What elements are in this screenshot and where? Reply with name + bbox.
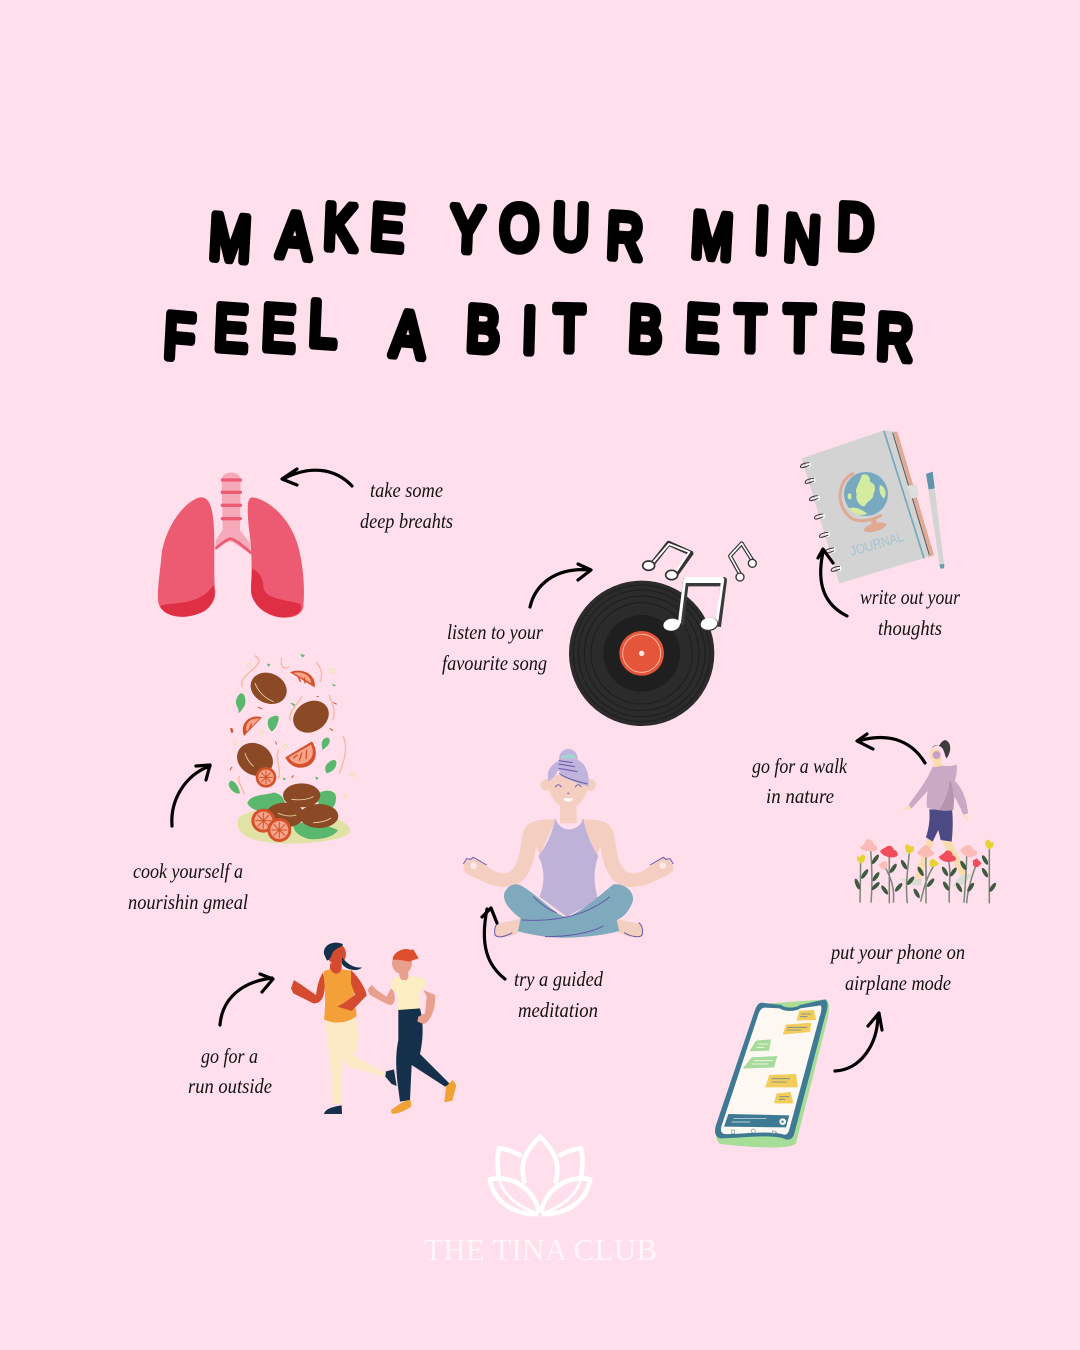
spiral rings <box>800 462 841 571</box>
patties <box>266 783 338 828</box>
label: go for a walk in nature <box>752 754 848 808</box>
top <box>538 818 598 917</box>
tomato wedges <box>290 671 315 687</box>
nav buttons <box>731 1129 777 1134</box>
floating nuts <box>231 667 335 782</box>
label: try a guided meditation: try a guided <box>514 967 603 991</box>
icon: meditating woman <box>463 749 673 938</box>
label: go for a walk in nature: in nature <box>766 784 834 808</box>
tomato slices <box>251 767 291 842</box>
large note <box>662 580 724 632</box>
message input bar <box>724 1114 789 1127</box>
icon: two women running <box>291 943 456 1114</box>
title line 2: FEEL A BIT BETTER <box>162 288 914 375</box>
label: write out your thoughts: thoughts <box>878 616 942 640</box>
pen <box>926 472 944 568</box>
label: listen to your favourite song <box>442 620 547 675</box>
label: go for a run outside: go for a <box>201 1044 258 1068</box>
squiggles <box>239 656 346 794</box>
label: take some deep breaths <box>360 478 453 533</box>
icon: journal and pen <box>800 430 944 583</box>
leaves <box>229 654 338 839</box>
icon: woman walking in flowers <box>854 740 997 903</box>
arrow: to runners <box>220 974 273 1025</box>
label: cook yourself a nourishing meal <box>128 859 248 914</box>
arrow: to meditation <box>482 908 505 979</box>
label: cook yourself a nourishing meal: nourishin gmeal <box>128 890 248 914</box>
label: go for a run outside: run outside <box>188 1074 272 1098</box>
label: put your phone on airplane mode: put your phone on <box>829 940 965 964</box>
chat bubbles <box>743 1010 816 1103</box>
hands <box>470 862 477 869</box>
arrow: to meal <box>172 765 210 826</box>
right runner <box>367 949 456 1114</box>
arrow: to lungs <box>282 469 352 486</box>
small dots <box>233 663 355 797</box>
small note <box>730 543 753 574</box>
hair <box>559 749 578 768</box>
arrow: to phone <box>835 1013 882 1071</box>
label: put your phone on airplane mode: airplane mode <box>845 971 951 995</box>
journal label: JOURNAL <box>848 528 906 559</box>
medium note <box>651 543 691 574</box>
skin: arms and shoulders <box>463 819 556 887</box>
label: try a guided meditation: meditation <box>518 998 598 1022</box>
icon: vinyl record and music notes <box>569 543 756 726</box>
label: write out your thoughts: write out your <box>860 585 961 609</box>
label: write out your thoughts <box>860 585 961 640</box>
label: take some deep breaths: take some <box>370 478 443 502</box>
label: listen to your favourite song: listen to your <box>447 620 544 644</box>
legs <box>504 884 633 938</box>
arrow: to walker <box>857 734 925 763</box>
icon: nourishing meal <box>229 654 355 844</box>
label: try a guided meditation <box>514 967 603 1022</box>
left runner <box>291 943 397 1114</box>
label: take some deep breaths: deep breahts <box>360 509 453 533</box>
title <box>162 191 914 375</box>
face <box>555 785 581 787</box>
walker <box>900 740 972 887</box>
arrow: to record <box>530 564 591 607</box>
label: go for a walk in nature: go for a walk <box>752 754 848 778</box>
feet <box>495 918 521 937</box>
sprinkles <box>229 696 337 778</box>
icon: phone on airplane mode <box>715 999 829 1147</box>
arrow: to journal <box>818 549 847 616</box>
logo: lotus flower <box>490 1137 590 1214</box>
label: go for a run outside <box>188 1044 272 1098</box>
plate <box>238 810 350 844</box>
flower leaves <box>854 854 997 899</box>
logo wordmark: THE TINA CLUB <box>424 1232 657 1267</box>
flower stems <box>860 847 989 903</box>
label: listen to your favourite song: favourite song <box>442 651 547 675</box>
icon: lungs <box>158 472 304 618</box>
title line 1: MAKE YOUR MIND <box>207 191 875 277</box>
ears and head <box>541 779 553 791</box>
label: put your phone on airplane mode <box>829 940 965 995</box>
flower heads <box>857 839 994 870</box>
label: cook yourself a nourishing meal: cook yourself a <box>133 859 243 883</box>
